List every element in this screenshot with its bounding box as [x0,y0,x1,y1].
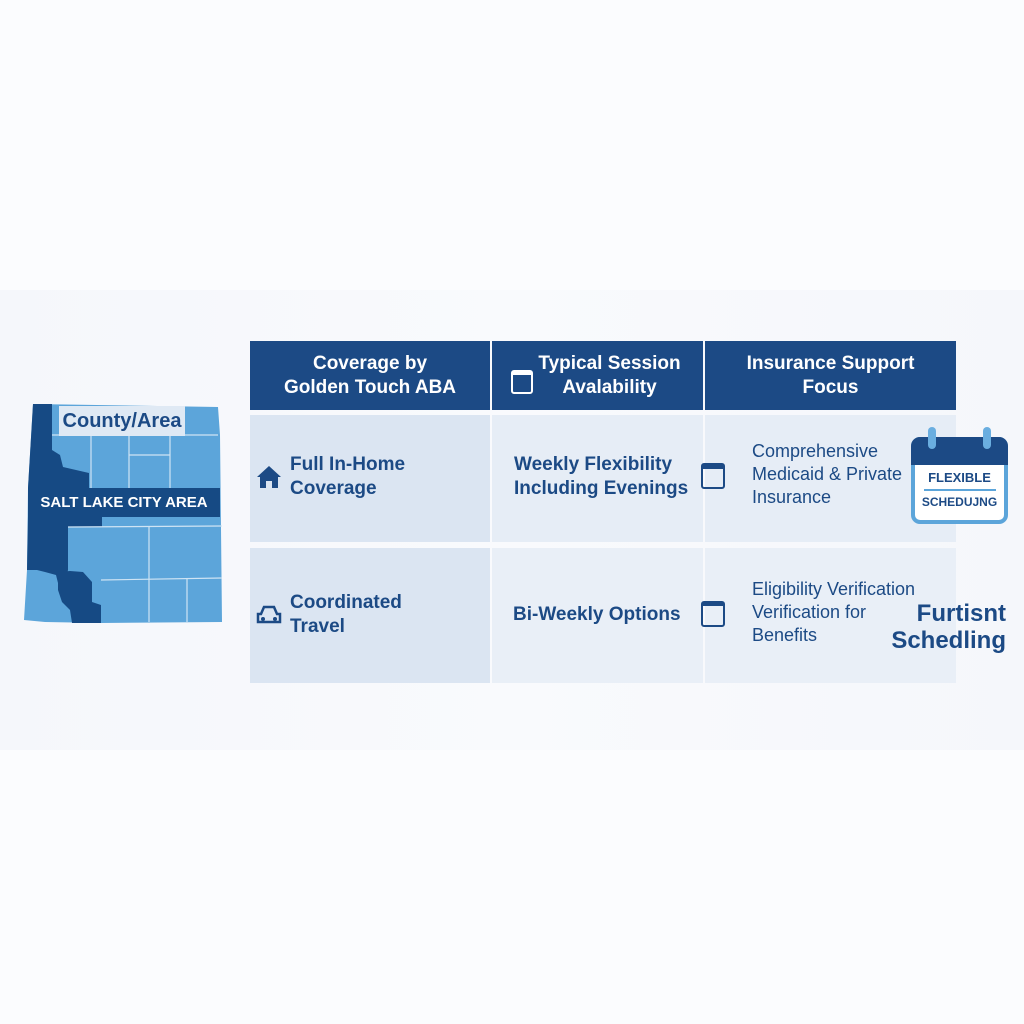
header row: Coverage by [313,352,427,374]
badge: flexible scheduling calendar [911,427,1008,524]
badge: flexible scheduling calendar: SCHEDUJNG [922,495,997,509]
row 1: Including Evenings [514,478,688,499]
background watermark [0,290,1024,750]
header row [250,341,956,410]
map of Utah counties [24,404,222,623]
overlay text: Furtisnt Schedling: Schedling [891,627,1006,654]
table [250,341,956,683]
header row: Avalability [562,376,657,398]
badge: flexible scheduling calendar: FLEXIBLE [928,470,991,485]
row 1: Insurance [752,487,831,507]
row 1: Weekly Flexibility [514,454,672,475]
header row: Insurance Support [747,352,914,374]
icon: calendar [701,463,725,489]
row 2: Verification for [752,602,866,622]
row 1 [250,415,956,542]
icon: header calendar [511,370,533,394]
row 2: Travel [290,616,345,637]
row 1: Full In-Home [290,454,405,475]
header row: Golden Touch ABA [284,376,456,398]
icon: calendar outline [701,601,725,627]
overlay text: Furtisnt Schedling [891,600,1006,654]
row 2: Eligibility Verification [752,579,915,599]
label: Salt Lake City Area [28,488,220,517]
row 2: Bi-Weekly Options [513,604,681,625]
header row: Typical Session [538,352,681,374]
overlay text: Furtisnt Schedling: Furtisnt [917,600,1006,627]
row 2 [250,548,956,683]
row 2: Benefits [752,625,817,645]
row 1: Coverage [290,478,377,499]
label: County/Area: County/Area [63,410,181,432]
row 2: Coordinated [290,592,402,613]
label: Salt Lake City Area: SALT LAKE CITY AREA [40,494,208,511]
label: County/Area [59,406,185,436]
icon: car [256,606,282,624]
header row: Focus [803,376,858,398]
row 1: Medicaid & Private [752,464,902,484]
row 1: Comprehensive [752,441,878,461]
icon: house [257,466,281,488]
